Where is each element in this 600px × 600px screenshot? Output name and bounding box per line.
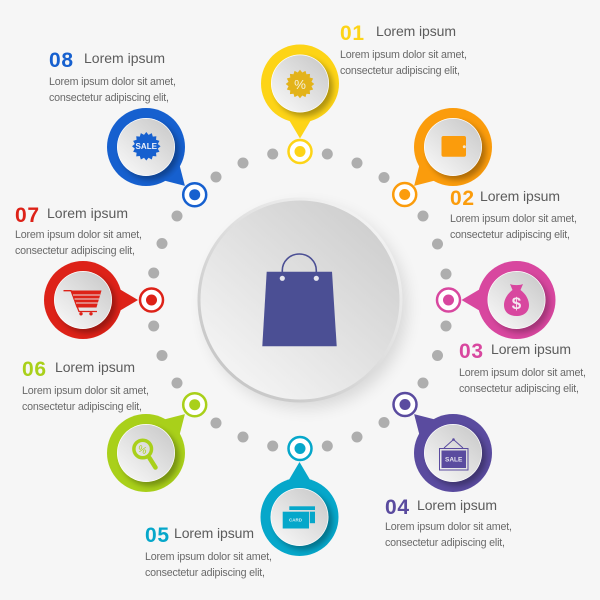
pin marker 01 [261, 44, 339, 138]
text block 07: Lorem ipsum dolor sit amet, [15, 229, 142, 241]
text block 05 [145, 524, 272, 579]
panel: step 04 [385, 393, 512, 549]
text block 08: consectetur adipiscing elit, [49, 92, 169, 104]
target dot 05 [288, 437, 312, 460]
text block 05: consectetur adipiscing elit, [145, 567, 265, 579]
text block 02: consectetur adipiscing elit, [450, 229, 570, 241]
icon: percent badge [286, 70, 314, 98]
panel: step 08 [49, 49, 206, 206]
pin marker 03 [462, 261, 556, 339]
text block 07: 07 [15, 204, 39, 227]
target dot 02 [393, 183, 416, 206]
pin marker 07 [44, 261, 138, 339]
text block 04: Lorem ipsum dolor sit amet, [385, 521, 512, 533]
icon: sale sign: SALE [445, 456, 463, 464]
text block 01: Lorem ipsum [376, 23, 456, 39]
text block 03: 03 [459, 340, 483, 363]
icon: shopping cart [64, 290, 102, 315]
text block 03 [459, 340, 586, 395]
panel: step 02 [393, 108, 577, 241]
pin marker 04 [414, 414, 492, 492]
text block 06 [22, 358, 149, 413]
target dot 04 [394, 393, 416, 416]
panel: step 03 [437, 261, 586, 395]
text block 05: 05 [145, 524, 169, 547]
text block 07: Lorem ipsum [47, 205, 128, 221]
text block 08: Lorem ipsum [84, 50, 165, 66]
text block 03: Lorem ipsum [491, 341, 571, 357]
text block 08 [49, 49, 176, 104]
pin marker 06 [107, 414, 185, 492]
text block 01 [340, 22, 467, 77]
icon: magnifier with percent [134, 440, 156, 468]
pin marker 08 [107, 108, 185, 186]
text block 03: Lorem ipsum dolor sit amet, [459, 367, 586, 379]
icon: credit cards: CARD [289, 518, 303, 522]
text block 04: 04 [385, 496, 409, 519]
text block 06: consectetur adipiscing elit, [22, 401, 142, 413]
icon: money bag: $ [512, 294, 522, 313]
icon: money bag [504, 284, 529, 316]
panel: step 06 [22, 358, 206, 492]
text block 06: Lorem ipsum dolor sit amet, [22, 385, 149, 397]
text block 04: Lorem ipsum [417, 497, 497, 513]
icon: wallet [442, 136, 466, 157]
text block 07: consectetur adipiscing elit, [15, 245, 135, 257]
text block 01: Lorem ipsum dolor sit amet, [340, 49, 467, 61]
icon: sale badge [132, 132, 161, 161]
target dot 01 [288, 140, 312, 163]
target dot 08 [183, 183, 206, 206]
target dot 07 [140, 288, 163, 312]
icon: magnifier with percent: % [136, 444, 148, 457]
text block 08: Lorem ipsum dolor sit amet, [49, 76, 176, 88]
text block 06: 06 [22, 358, 46, 381]
pin marker 05 [260, 462, 338, 556]
target dot 06 [183, 393, 206, 416]
text block 06: Lorem ipsum [55, 359, 135, 375]
text block 08: 08 [49, 49, 73, 72]
icon: percent badge: % [294, 77, 306, 92]
text block 01: consectetur adipiscing elit, [340, 65, 460, 77]
text block 02: Lorem ipsum [480, 188, 560, 204]
panel: step 07 [15, 204, 163, 339]
panel: step 05 [145, 437, 338, 579]
dotted ring [148, 148, 451, 452]
icon: sale badge: SALE [136, 142, 158, 151]
icon: shopping bag [262, 254, 337, 346]
text block 04 [385, 496, 512, 549]
icon: credit cards [283, 506, 315, 528]
text block 04: consectetur adipiscing elit, [385, 537, 505, 549]
text block 01: 01 [340, 22, 364, 45]
text block 02: Lorem ipsum dolor sit amet, [450, 213, 577, 225]
panel: step 01 [261, 22, 467, 163]
target dot 03 [437, 288, 460, 312]
text block 05: Lorem ipsum dolor sit amet, [145, 551, 272, 563]
text block 03: consectetur adipiscing elit, [459, 383, 579, 395]
text block 05: Lorem ipsum [174, 525, 254, 541]
central circle with shopping bag [198, 198, 407, 408]
icon: sale sign [440, 438, 468, 470]
text block 07 [15, 204, 142, 257]
text block 02: 02 [450, 187, 474, 210]
pin marker 02 [414, 108, 492, 186]
text block 02 [450, 187, 577, 241]
